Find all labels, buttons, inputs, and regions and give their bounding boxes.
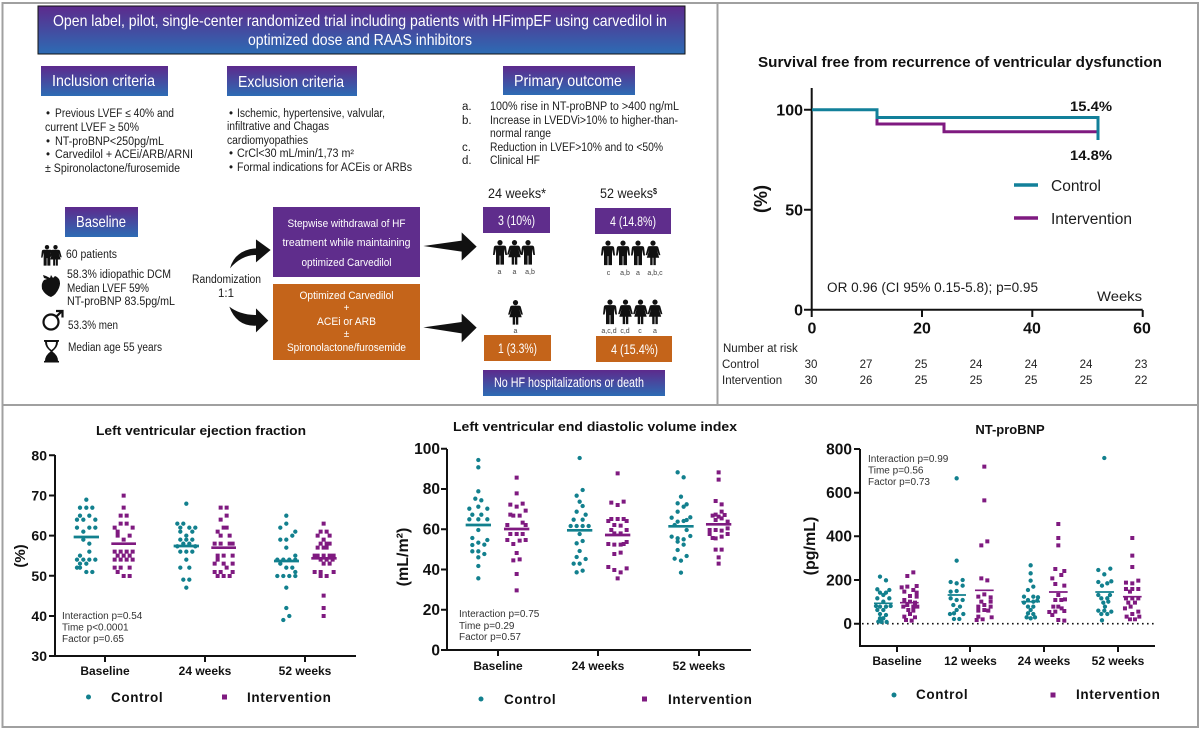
chart: Kaplan-Meier survival: 100 <box>776 102 803 120</box>
panel: exclusion criteria: Ischemic, hypertensive, valvular, <box>237 108 385 120</box>
heading: 24 weeks: 24 weeks* <box>488 185 546 201</box>
heading: survival chart: Survival free from recurrence of ventricular dysfunction <box>758 55 1162 71</box>
scatter points <box>74 496 337 620</box>
icons: patients control 52 weeks: a <box>653 328 657 335</box>
box: intervention treatment <box>273 207 420 277</box>
chart: Kaplan-Meier survival: (%) <box>751 185 771 213</box>
result: intervention 52 weeks: 4 (14.8%) <box>610 213 656 229</box>
box: control treatment: + <box>344 303 350 314</box>
panel: exclusion criteria: • <box>229 148 233 160</box>
chart: left ventricular ejection fraction <box>12 423 356 705</box>
chart: NT-proBNP: 800 <box>826 442 852 458</box>
chart: Kaplan-Meier survival: Control <box>1051 178 1101 195</box>
chart: Kaplan-Meier survival: Weeks <box>1097 289 1142 304</box>
table: number at risk: 26 <box>860 375 872 387</box>
chart: NT-proBNP: Time p=0.56 <box>868 466 924 476</box>
panel: inclusion criteria <box>41 66 193 175</box>
icon: male symbol <box>44 311 62 330</box>
legend: NT-proBNP: Control <box>916 687 968 702</box>
chart: left ventricular end diastolic volume index: Interaction p=0.75 <box>459 609 540 620</box>
chart: NT-proBNP: 600 <box>826 485 852 502</box>
chart: left ventricular ejection fraction: 60 <box>31 528 47 544</box>
chart: Kaplan-Meier survival: 50 <box>785 202 803 220</box>
table: number at risk: 25 <box>1025 375 1037 387</box>
panel: inclusion criteria: • <box>46 108 50 120</box>
panel: exclusion criteria: Formal indications for ACEis or ARBs <box>237 162 412 174</box>
title banner <box>38 6 685 54</box>
chart: left ventricular end diastolic volume index <box>395 419 752 707</box>
table: number at risk: Control <box>722 359 759 371</box>
title banner: optimized dose and RAAS inhibitors <box>248 32 472 49</box>
chart: left ventricular end diastolic volume index: (mL/m²) <box>395 528 412 586</box>
table: number at risk: 23 <box>1135 359 1147 371</box>
table: number at risk: 30 <box>805 375 817 387</box>
result: control 24 weeks <box>484 335 551 361</box>
title banner: Open label, pilot, single-center randomized trial including patients with HFimpEF using carvedilol in <box>53 13 667 30</box>
scatter points <box>874 458 1142 622</box>
chart: Kaplan-Meier survival: 0 <box>808 320 817 338</box>
table: number at risk: 24 <box>970 359 983 371</box>
table: number at risk: 24 <box>1025 359 1038 371</box>
chart: left ventricular ejection fraction: 70 <box>31 488 47 504</box>
icons: patients control 52 weeks: c <box>638 328 642 335</box>
icons: patient control 24 weeks: a <box>514 328 518 335</box>
chart: left ventricular end diastolic volume index: 20 <box>423 602 440 619</box>
chart: left ventricular end diastolic volume index: Time p=0.29 <box>459 621 515 632</box>
label: randomization <box>192 274 261 300</box>
legend: LVEF <box>86 690 331 705</box>
table: number at risk: Intervention <box>722 375 782 387</box>
chart: left ventricular ejection fraction: 24 weeks <box>179 664 232 678</box>
panel: exclusion criteria: CrCl<30 mL/min/1,73 m² <box>237 148 354 160</box>
heading: NT-proBNP: NT-proBNP <box>975 422 1045 437</box>
icons: patients intervention 24 weeks: a,b <box>525 269 535 276</box>
panel: inclusion criteria: Inclusion criteria <box>52 73 155 90</box>
panel: primary outcome: c. <box>462 142 471 154</box>
panel: primary outcome: normal range <box>490 128 551 140</box>
callout: no hospitalizations <box>483 370 665 396</box>
panel: inclusion criteria: current LVEF ≥ 50% <box>45 122 139 134</box>
box: control treatment <box>273 284 420 360</box>
table: number at risk: 24 <box>1080 359 1093 371</box>
chart: left ventricular ejection fraction: (%) <box>12 544 29 568</box>
chart: Kaplan-Meier survival <box>722 55 1162 387</box>
panel: exclusion criteria: infiltrative and Chagas <box>227 121 329 133</box>
box: intervention treatment: optimized Carvedilol <box>302 257 392 269</box>
box: intervention treatment: treatment while maintaining <box>282 237 410 249</box>
legend: LVEDVi <box>478 692 752 707</box>
icons: patients control 52 weeks <box>601 300 662 335</box>
chart: left ventricular ejection fraction: Time p<0.0001 <box>62 622 129 634</box>
result: intervention 24 weeks <box>483 207 550 233</box>
icon: hourglass <box>44 340 59 362</box>
label: randomization: Randomization <box>192 274 261 286</box>
panel: primary outcome: b. <box>462 115 472 127</box>
panel: baseline characteristics: 53.3% men <box>68 320 118 332</box>
arrow: intervention to results <box>423 232 477 261</box>
chart: Kaplan-Meier survival: 20 <box>913 320 931 338</box>
box: control treatment: Optimized Carvedilol <box>300 290 394 302</box>
panel: baseline characteristics: 58.3% idiopathic DCM <box>67 269 171 281</box>
box: control treatment: Spironolactone/furosemide <box>287 342 406 354</box>
chart: left ventricular ejection fraction: Factor p=0.65 <box>62 634 124 645</box>
icons: patients intervention 52 weeks: a,b <box>620 270 630 277</box>
icon: couple <box>41 245 62 266</box>
panel: inclusion criteria: • <box>46 136 50 148</box>
icons: patients intervention 24 weeks: a <box>513 269 517 276</box>
label: randomization: 1:1 <box>218 288 234 300</box>
legend: LVEF: Intervention <box>247 690 331 705</box>
chart: left ventricular end diastolic volume index: 24 weeks <box>572 659 625 673</box>
box: control treatment: ± <box>344 329 350 340</box>
result: control 24 weeks: 1 (3.3%) <box>498 340 537 356</box>
legend: LVEF: Control <box>111 690 163 705</box>
arrow: to withdrawal arm <box>230 239 271 268</box>
chart: NT-proBNP: 200 <box>826 572 852 590</box>
panel: primary outcome: Reduction in LVEF>10% and to <50% <box>490 142 663 154</box>
icons: patients intervention 52 weeks: a,b,c <box>647 270 663 277</box>
panel: baseline characteristics: Median age 55 years <box>68 342 162 354</box>
chart: NT-proBNP: 400 <box>826 528 852 546</box>
legend: LVEDVi: Control <box>504 692 556 707</box>
chart: NT-proBNP: 12 weeks <box>944 654 997 668</box>
icons: patients intervention 52 weeks: a <box>636 270 640 277</box>
legend: NT-proBNP <box>892 687 1160 702</box>
chart: Kaplan-Meier survival: 40 <box>1023 320 1041 338</box>
panel: inclusion criteria: • <box>46 149 50 161</box>
heading: 52 weeks: 52 weeks <box>600 185 659 201</box>
icon: heart <box>42 275 60 297</box>
panel: baseline characteristics: NT-proBNP 83.5pg/mL <box>67 296 176 308</box>
chart: left ventricular ejection fraction: 50 <box>31 568 47 584</box>
chart: left ventricular end diastolic volume index: 52 weeks <box>673 659 726 673</box>
scatter points <box>466 458 731 590</box>
chart: left ventricular end diastolic volume index: 40 <box>423 562 440 579</box>
panel: exclusion criteria <box>227 66 412 174</box>
chart: Kaplan-Meier survival: 60 <box>1133 320 1151 338</box>
chart: left ventricular end diastolic volume index: 100 <box>414 441 440 458</box>
panel: baseline characteristics: Median LVEF 59% <box>67 283 149 295</box>
table: number at risk: Number at risk <box>723 343 798 355</box>
chart: left ventricular ejection fraction: 52 weeks <box>279 664 332 678</box>
icons: patient control 24 weeks <box>508 300 523 335</box>
table: number at risk: 27 <box>860 359 872 371</box>
panel: baseline characteristics: 60 patients <box>66 249 117 261</box>
box: intervention treatment: Stepwise withdrawal of HF <box>288 218 406 230</box>
chart: NT-proBNP: Baseline <box>872 654 922 668</box>
chart: left ventricular ejection fraction: 40 <box>31 608 47 624</box>
callout: no hospitalizations: No HF hospitalizations or death <box>494 375 644 390</box>
panel: inclusion criteria: ± Spironolactone/furosemide <box>45 163 180 175</box>
icons: patients intervention 24 weeks: a <box>498 269 502 276</box>
panel: primary outcome: Clinical HF <box>490 155 540 167</box>
chart: NT-proBNP: Factor p=0.73 <box>868 477 930 488</box>
panel: inclusion criteria: Carvedilol + ACEi/ARB/ARNI <box>55 149 193 161</box>
box: control treatment: ACEi or ARB <box>317 316 376 328</box>
table: number at risk: 22 <box>1135 375 1147 387</box>
result: control 52 weeks: 4 (15.4%) <box>611 341 658 357</box>
panel: primary outcome: 100% rise in NT-proBNP to >400 ng/mL <box>490 101 680 113</box>
panel: baseline characteristics <box>65 207 176 354</box>
icons: patients intervention 24 weeks <box>493 240 535 276</box>
chart: left ventricular ejection fraction: 80 <box>31 448 47 464</box>
panel: exclusion criteria: cardiomyopathies <box>227 135 308 147</box>
chart: NT-proBNP: (pg/mL) <box>802 517 819 575</box>
chart: NT-proBNP <box>802 422 1160 702</box>
result: control 52 weeks <box>596 336 672 362</box>
table: number at risk: 25 <box>970 375 982 387</box>
legend: LVEDVi: Intervention <box>668 692 752 707</box>
chart: NT-proBNP: 0 <box>843 616 852 633</box>
icons: patients intervention 52 weeks: c <box>607 270 611 277</box>
chart: Kaplan-Meier survival: 0 <box>794 302 803 320</box>
result: intervention 52 weeks <box>595 208 671 234</box>
panel: primary outcome: d. <box>462 155 472 167</box>
chart: left ventricular end diastolic volume index: 80 <box>423 481 440 498</box>
heading: 52 weeks: $ <box>653 187 657 196</box>
panel: exclusion criteria: • <box>229 162 233 174</box>
chart: left ventricular ejection fraction: 30 <box>31 648 47 664</box>
chart: left ventricular ejection fraction: Interaction p=0.54 <box>62 611 143 622</box>
arrow: to optimized arm <box>229 307 268 332</box>
result: intervention 24 weeks: 3 (10%) <box>498 212 535 228</box>
chart: Kaplan-Meier survival: OR 0.96 (CI 95% 0.15-5.8); p=0.95 <box>827 280 1038 295</box>
chart: Kaplan-Meier survival: 15.4% <box>1070 98 1113 114</box>
legend: NT-proBNP: Intervention <box>1076 687 1160 702</box>
panel: primary outcome: a. <box>462 101 472 113</box>
chart: left ventricular end diastolic volume index: Factor p=0.57 <box>459 632 521 643</box>
panel: inclusion criteria: NT-proBNP<250pg/mL <box>55 136 165 148</box>
panel: inclusion criteria: Previous LVEF ≤ 40% and <box>55 108 174 120</box>
icons: patients control 52 weeks: a,c,d <box>601 328 617 335</box>
arrow: control to results <box>423 314 477 342</box>
table: number at risk: 30 <box>805 359 817 371</box>
panel: exclusion criteria: • <box>229 108 233 120</box>
icons: patients intervention 52 weeks <box>601 240 663 277</box>
chart: Kaplan-Meier survival: 14.8% <box>1070 147 1113 163</box>
chart: NT-proBNP: 24 weeks <box>1018 654 1071 668</box>
chart: Kaplan-Meier survival: Intervention <box>1051 211 1132 228</box>
icons: patients control 52 weeks: c,d <box>620 328 630 335</box>
panel: primary outcome <box>462 66 680 167</box>
chart: left ventricular end diastolic volume index: Baseline <box>473 659 523 673</box>
panel: exclusion criteria: Exclusion criteria <box>238 74 344 91</box>
table: number at risk: 25 <box>915 359 927 371</box>
panel: primary outcome: Primary outcome <box>514 73 622 90</box>
chart: left ventricular end diastolic volume index: 0 <box>431 642 440 660</box>
panel: primary outcome: Increase in LVEDVi>10% to higher-than- <box>490 115 678 127</box>
heading: LVEF: Left ventricular ejection fraction <box>96 423 306 438</box>
panel: baseline characteristics: Baseline <box>76 214 126 231</box>
chart: NT-proBNP: 52 weeks <box>1092 654 1145 668</box>
table: number at risk <box>722 343 1147 387</box>
chart: left ventricular end diastolic volume index: 60 <box>423 522 440 538</box>
table: number at risk: 25 <box>915 375 927 387</box>
table: number at risk: 25 <box>1080 375 1092 387</box>
chart: NT-proBNP: Interaction p=0.99 <box>868 454 949 465</box>
heading: LVEDVi: Left ventricular end diastolic volume index <box>453 419 738 434</box>
chart: left ventricular ejection fraction: Baseline <box>80 664 130 678</box>
